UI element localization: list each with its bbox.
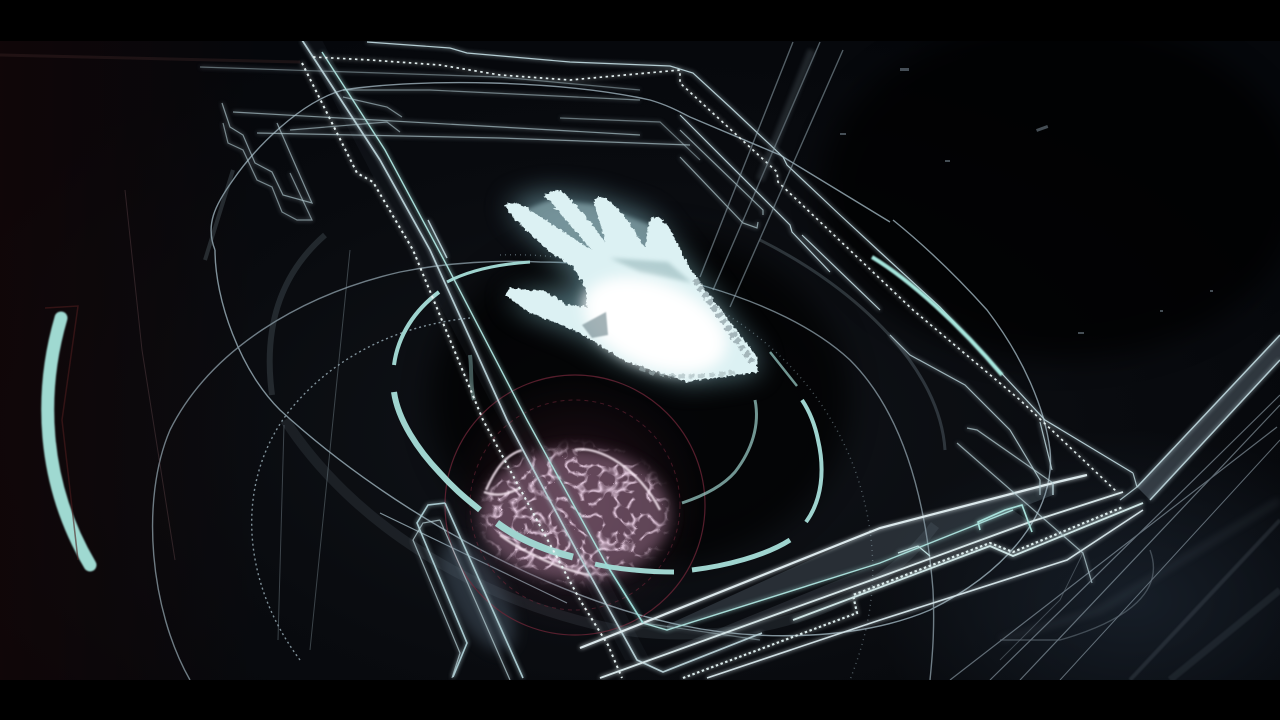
finger backing: [520, 200, 690, 280]
hand glow: [505, 193, 758, 382]
frame lines: [200, 40, 1280, 680]
sphere cells: [485, 450, 665, 578]
faint vertical lines: [125, 190, 350, 650]
floating particles: [840, 68, 1213, 334]
lower left frame: [417, 503, 523, 678]
hand edge speckle: [640, 280, 752, 376]
palm crease: [582, 312, 608, 338]
upper left circuit: [222, 103, 312, 203]
dark inner panel: [430, 230, 850, 570]
red scanner rings: [445, 375, 705, 635]
bright teal bar on right: [872, 257, 1002, 375]
left frame edge: [302, 40, 762, 672]
faint red bracket: [45, 306, 78, 560]
left teal arc: [48, 318, 90, 565]
right side: [890, 335, 1040, 495]
top edges: [313, 57, 1117, 492]
sphere: [480, 449, 670, 581]
left dotted edge: [302, 63, 622, 678]
hand shape: [505, 190, 758, 382]
bottom rails: [580, 475, 1087, 648]
knuckle shadow: [610, 258, 692, 283]
outer rings: [153, 83, 1051, 680]
sphere bright edges: [484, 449, 660, 575]
hand icon: [505, 190, 758, 392]
sphere glow: [480, 449, 670, 581]
top light beams: [700, 42, 843, 307]
palm core: [570, 258, 740, 392]
main segmented ring: [394, 262, 822, 572]
light bands: [302, 40, 1280, 672]
